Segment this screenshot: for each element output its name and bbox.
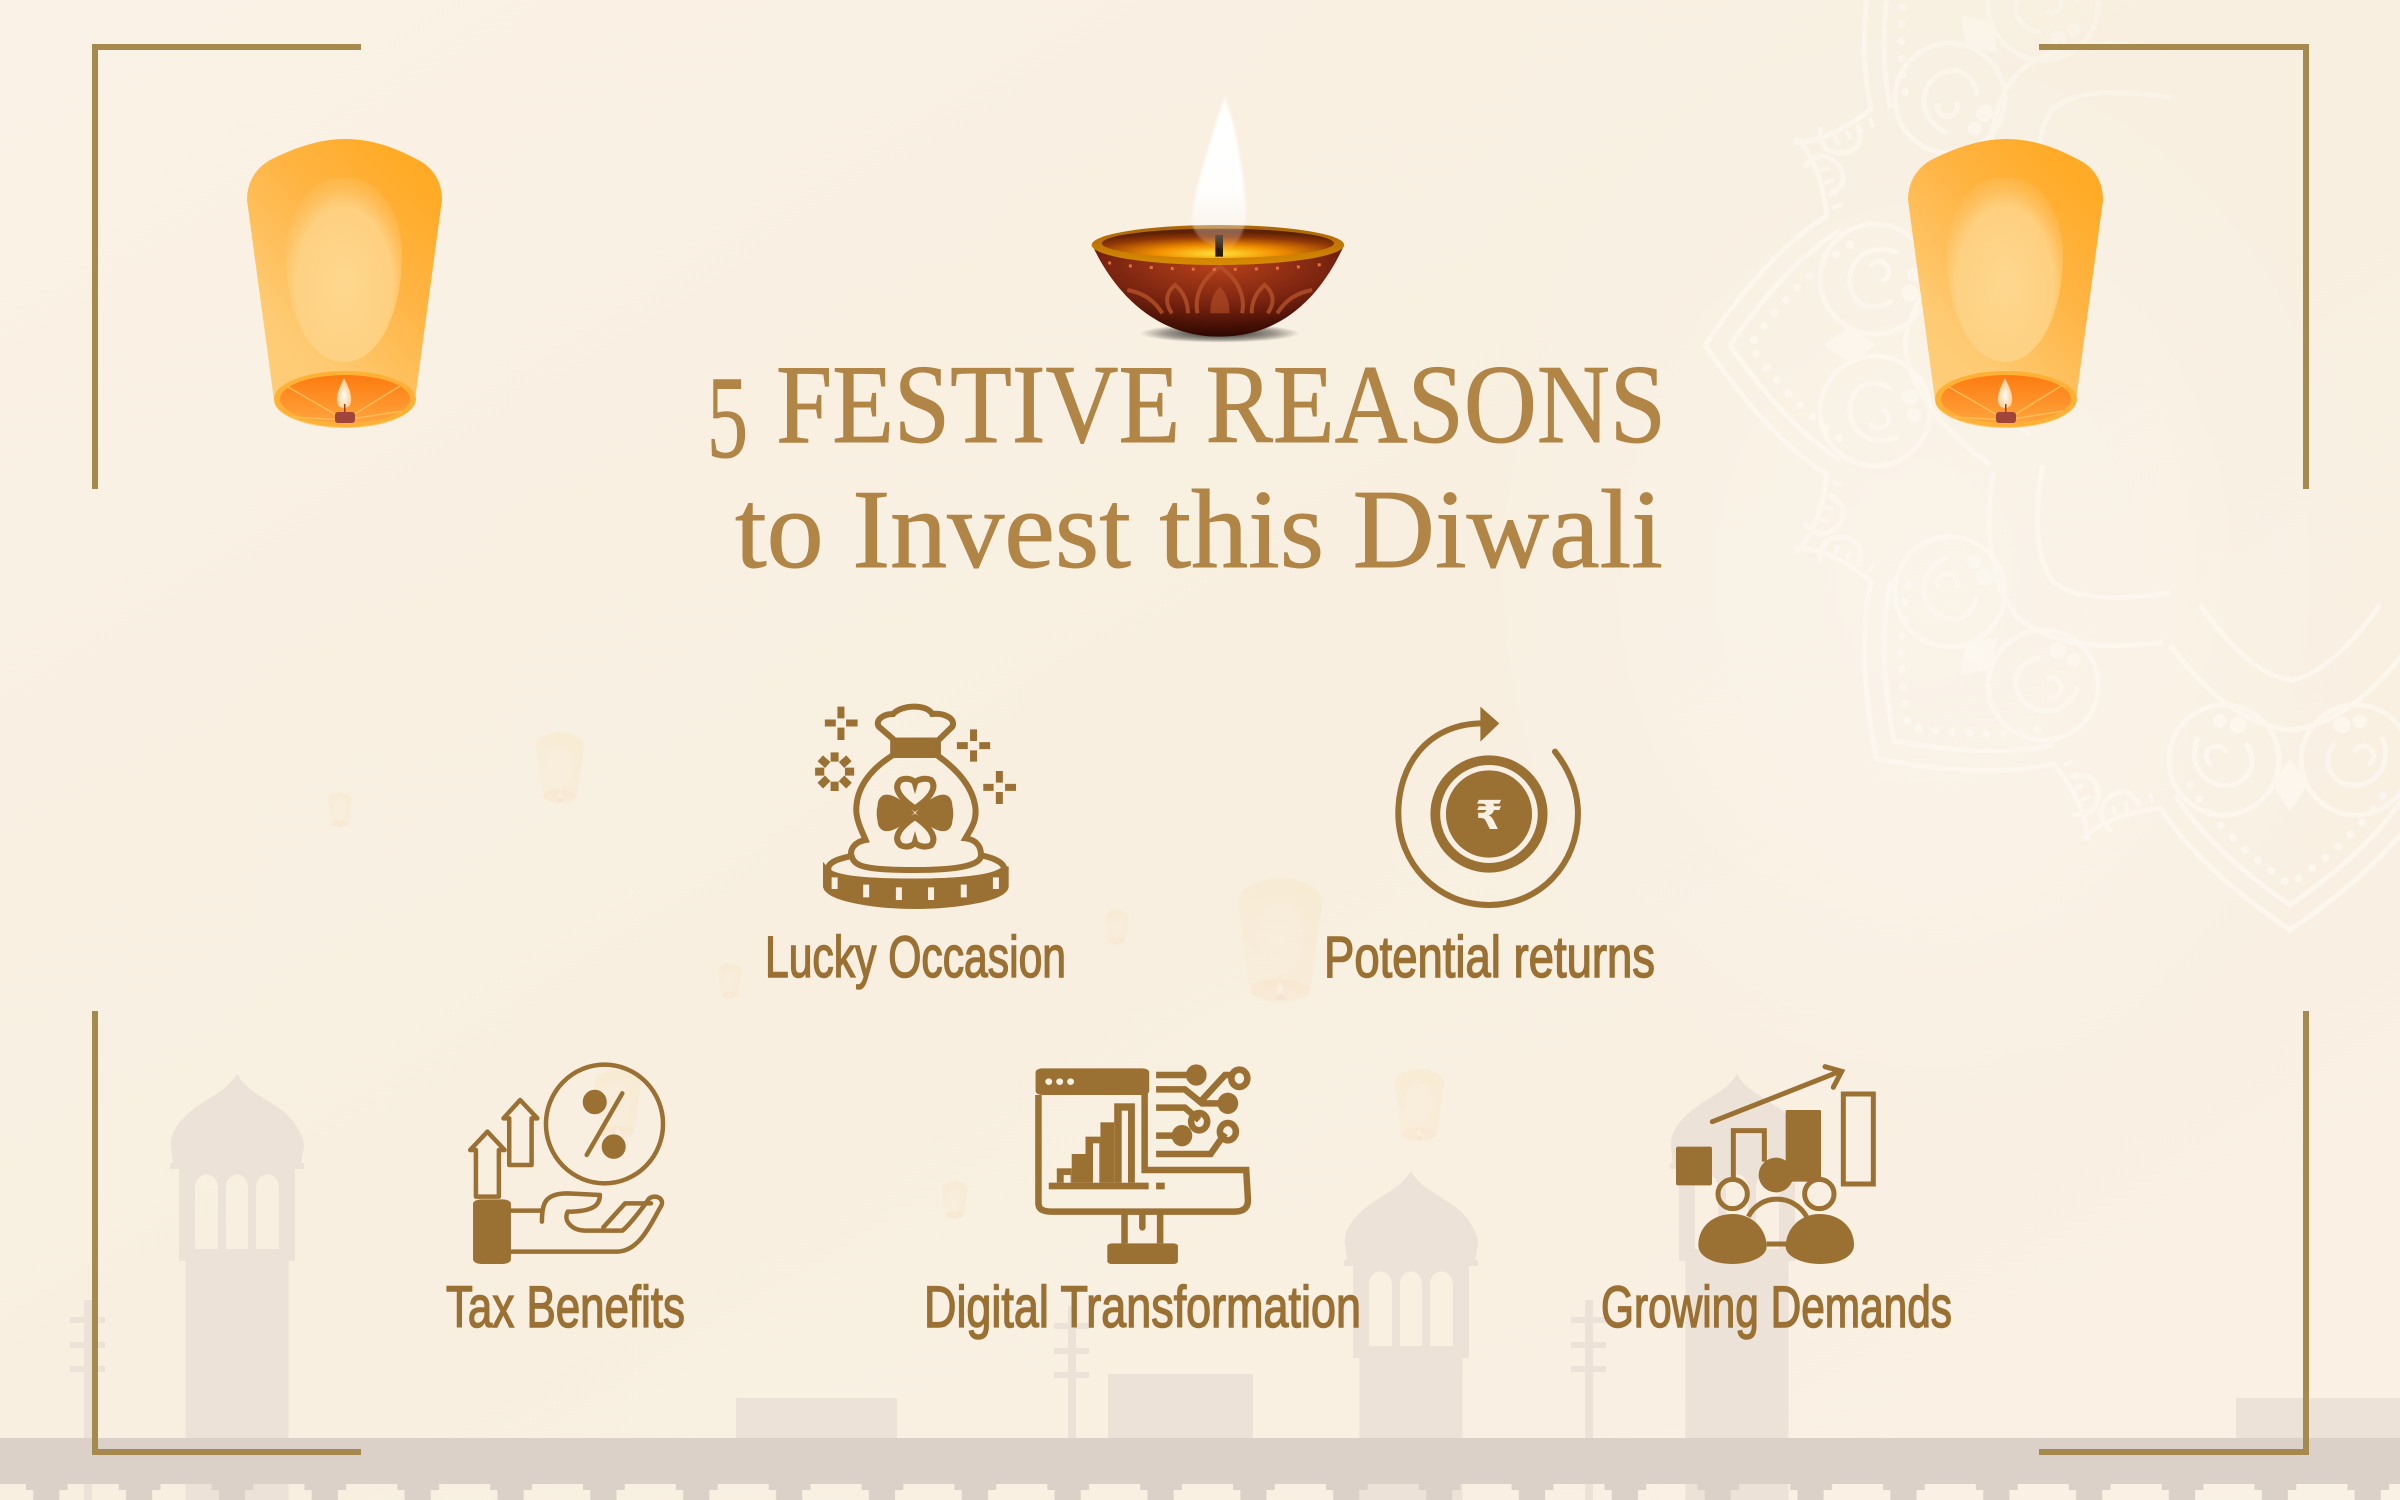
label: potential returns: Potential returns	[1324, 925, 1655, 990]
rupee symbol: ₹	[1475, 793, 1503, 839]
title: FESTIVE REASONS	[776, 343, 1666, 467]
title: 5	[707, 352, 748, 483]
reason: lucky occasion	[765, 707, 1066, 990]
icon: rupee coin with circular arrow	[1398, 707, 1578, 905]
icon: group with rising bar chart	[1676, 1067, 1873, 1264]
icon: right sky lantern	[1908, 139, 2103, 428]
background glow	[1450, 0, 2400, 1150]
icon: money bag with clover	[815, 707, 1016, 906]
mandala watermark	[1705, 0, 2400, 930]
reason: growing demands	[1601, 1067, 1952, 1340]
faded background lanterns	[328, 732, 1444, 1219]
label: growing demands: Growing Demands	[1601, 1275, 1952, 1340]
icon: monitor with chart and circuit	[1036, 1064, 1248, 1264]
icon: hand holding percent	[470, 1065, 663, 1264]
label: tax benefits: Tax Benefits	[446, 1275, 685, 1340]
label: lucky occasion: Lucky Occasion	[765, 925, 1066, 990]
icon: left sky lantern	[247, 139, 442, 428]
title: to Invest this Diwali	[735, 468, 1663, 592]
city skyline silhouette	[0, 1074, 2400, 1500]
reason: tax benefits	[446, 1065, 685, 1340]
reason: potential returns	[1324, 707, 1655, 990]
title	[707, 343, 1666, 592]
label: digital transformation: Digital Transformation	[924, 1275, 1361, 1340]
icon: diya lamp	[1092, 97, 1344, 343]
reason: digital transformation	[924, 1064, 1361, 1340]
